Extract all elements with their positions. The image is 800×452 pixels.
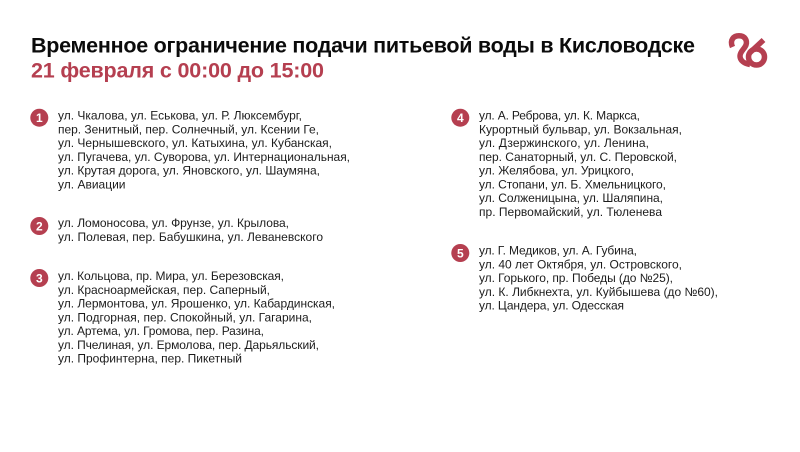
subtitle: date and time: 21 февраля с 00:00 до 15:00 xyxy=(31,58,324,82)
badge 5 xyxy=(451,244,469,262)
addresses group 2 xyxy=(58,216,323,244)
badge 1 xyxy=(30,109,48,127)
addresses group 1: пер. Зенитный, пер. Солнечный, ул. Ксении Ге, xyxy=(58,122,319,136)
badge 3 xyxy=(30,269,48,287)
list group 1 xyxy=(30,109,350,191)
badge 2 xyxy=(30,217,48,235)
addresses group 3: ул. Красноармейская, пер. Саперный, xyxy=(58,283,270,297)
addresses group 1: ул. Пугачева, ул. Суворова, ул. Интернациональная, xyxy=(58,150,350,164)
addresses group 4: ул. А. Реброва, ул. К. Маркса, xyxy=(479,109,640,123)
addresses group 4: ул. Стопани, ул. Б. Хмельницкого, xyxy=(479,177,666,191)
addresses group 4: Курортный бульвар, ул. Вокзальная, xyxy=(479,122,682,136)
badge 4: 4 xyxy=(457,111,464,125)
list group 4 xyxy=(451,109,682,219)
addresses group 5: ул. Цандера, ул. Одесская xyxy=(479,299,624,313)
list group 5 xyxy=(451,244,718,313)
badge 1: 1 xyxy=(36,111,43,125)
addresses group 1 xyxy=(58,109,350,191)
icon: logo 26 xyxy=(731,36,764,65)
list group 3 xyxy=(30,269,335,366)
addresses group 3: ул. Пчелиная, ул. Ермолова, пер. Дарьяльский, xyxy=(58,338,319,352)
addresses group 1: ул. Авиации xyxy=(58,177,126,191)
addresses group 3 xyxy=(58,269,335,366)
badge 5: 5 xyxy=(457,246,464,260)
addresses group 4 xyxy=(479,109,682,219)
addresses group 4: ул. Желябова, ул. Урицкого, xyxy=(479,164,634,178)
addresses group 5 xyxy=(479,244,718,313)
addresses group 5: ул. Горького, пр. Победы (до №25), xyxy=(479,271,673,285)
badge 3: 3 xyxy=(36,271,43,285)
addresses group 4: пр. Первомайский, ул. Тюленева xyxy=(479,205,662,219)
addresses group 4: ул. Солженицына, ул. Шаляпина, xyxy=(479,191,663,205)
addresses group 3: ул. Профинтерна, пер. Пикетный xyxy=(58,352,242,366)
addresses group 1: ул. Чкалова, ул. Еськова, ул. Р. Люксембург, xyxy=(58,109,302,123)
addresses group 3: ул. Подгорная, пер. Спокойный, ул. Гагарина, xyxy=(58,310,312,324)
list group 2 xyxy=(30,216,323,244)
addresses group 5: ул. 40 лет Октября, ул. Островского, xyxy=(479,257,682,271)
badge 2: 2 xyxy=(36,219,43,233)
addresses group 5: ул. К. Либкнехта, ул. Куйбышева (до №60), xyxy=(479,285,718,299)
badge 4 xyxy=(451,109,469,127)
addresses group 2: ул. Ломоносова, ул. Фрунзе, ул. Крылова, xyxy=(58,216,289,230)
addresses group 3: ул. Артема, ул. Громова, пер. Разина, xyxy=(58,324,264,338)
addresses group 1: ул. Крутая дорога, ул. Яновского, ул. Шаумяна, xyxy=(58,164,320,178)
addresses group 5: ул. Г. Медиков, ул. А. Губина, xyxy=(479,244,637,258)
addresses group 4: ул. Дзержинского, ул. Ленина, xyxy=(479,136,649,150)
addresses group 3: ул. Кольцова, пр. Мира, ул. Березовская, xyxy=(58,269,284,283)
addresses group 2: ул. Полевая, пер. Бабушкина, ул. Леваневского xyxy=(58,230,323,244)
addresses group 4: пер. Санаторный, ул. С. Перовской, xyxy=(479,150,677,164)
addresses group 3: ул. Лермонтова, ул. Ярошенко, ул. Кабардинская, xyxy=(58,297,335,311)
title: Временное ограничение подачи питьевой воды в Кисловодске xyxy=(31,34,695,58)
addresses group 1: ул. Чернышевского, ул. Катыхина, ул. Кубанская, xyxy=(58,136,332,150)
